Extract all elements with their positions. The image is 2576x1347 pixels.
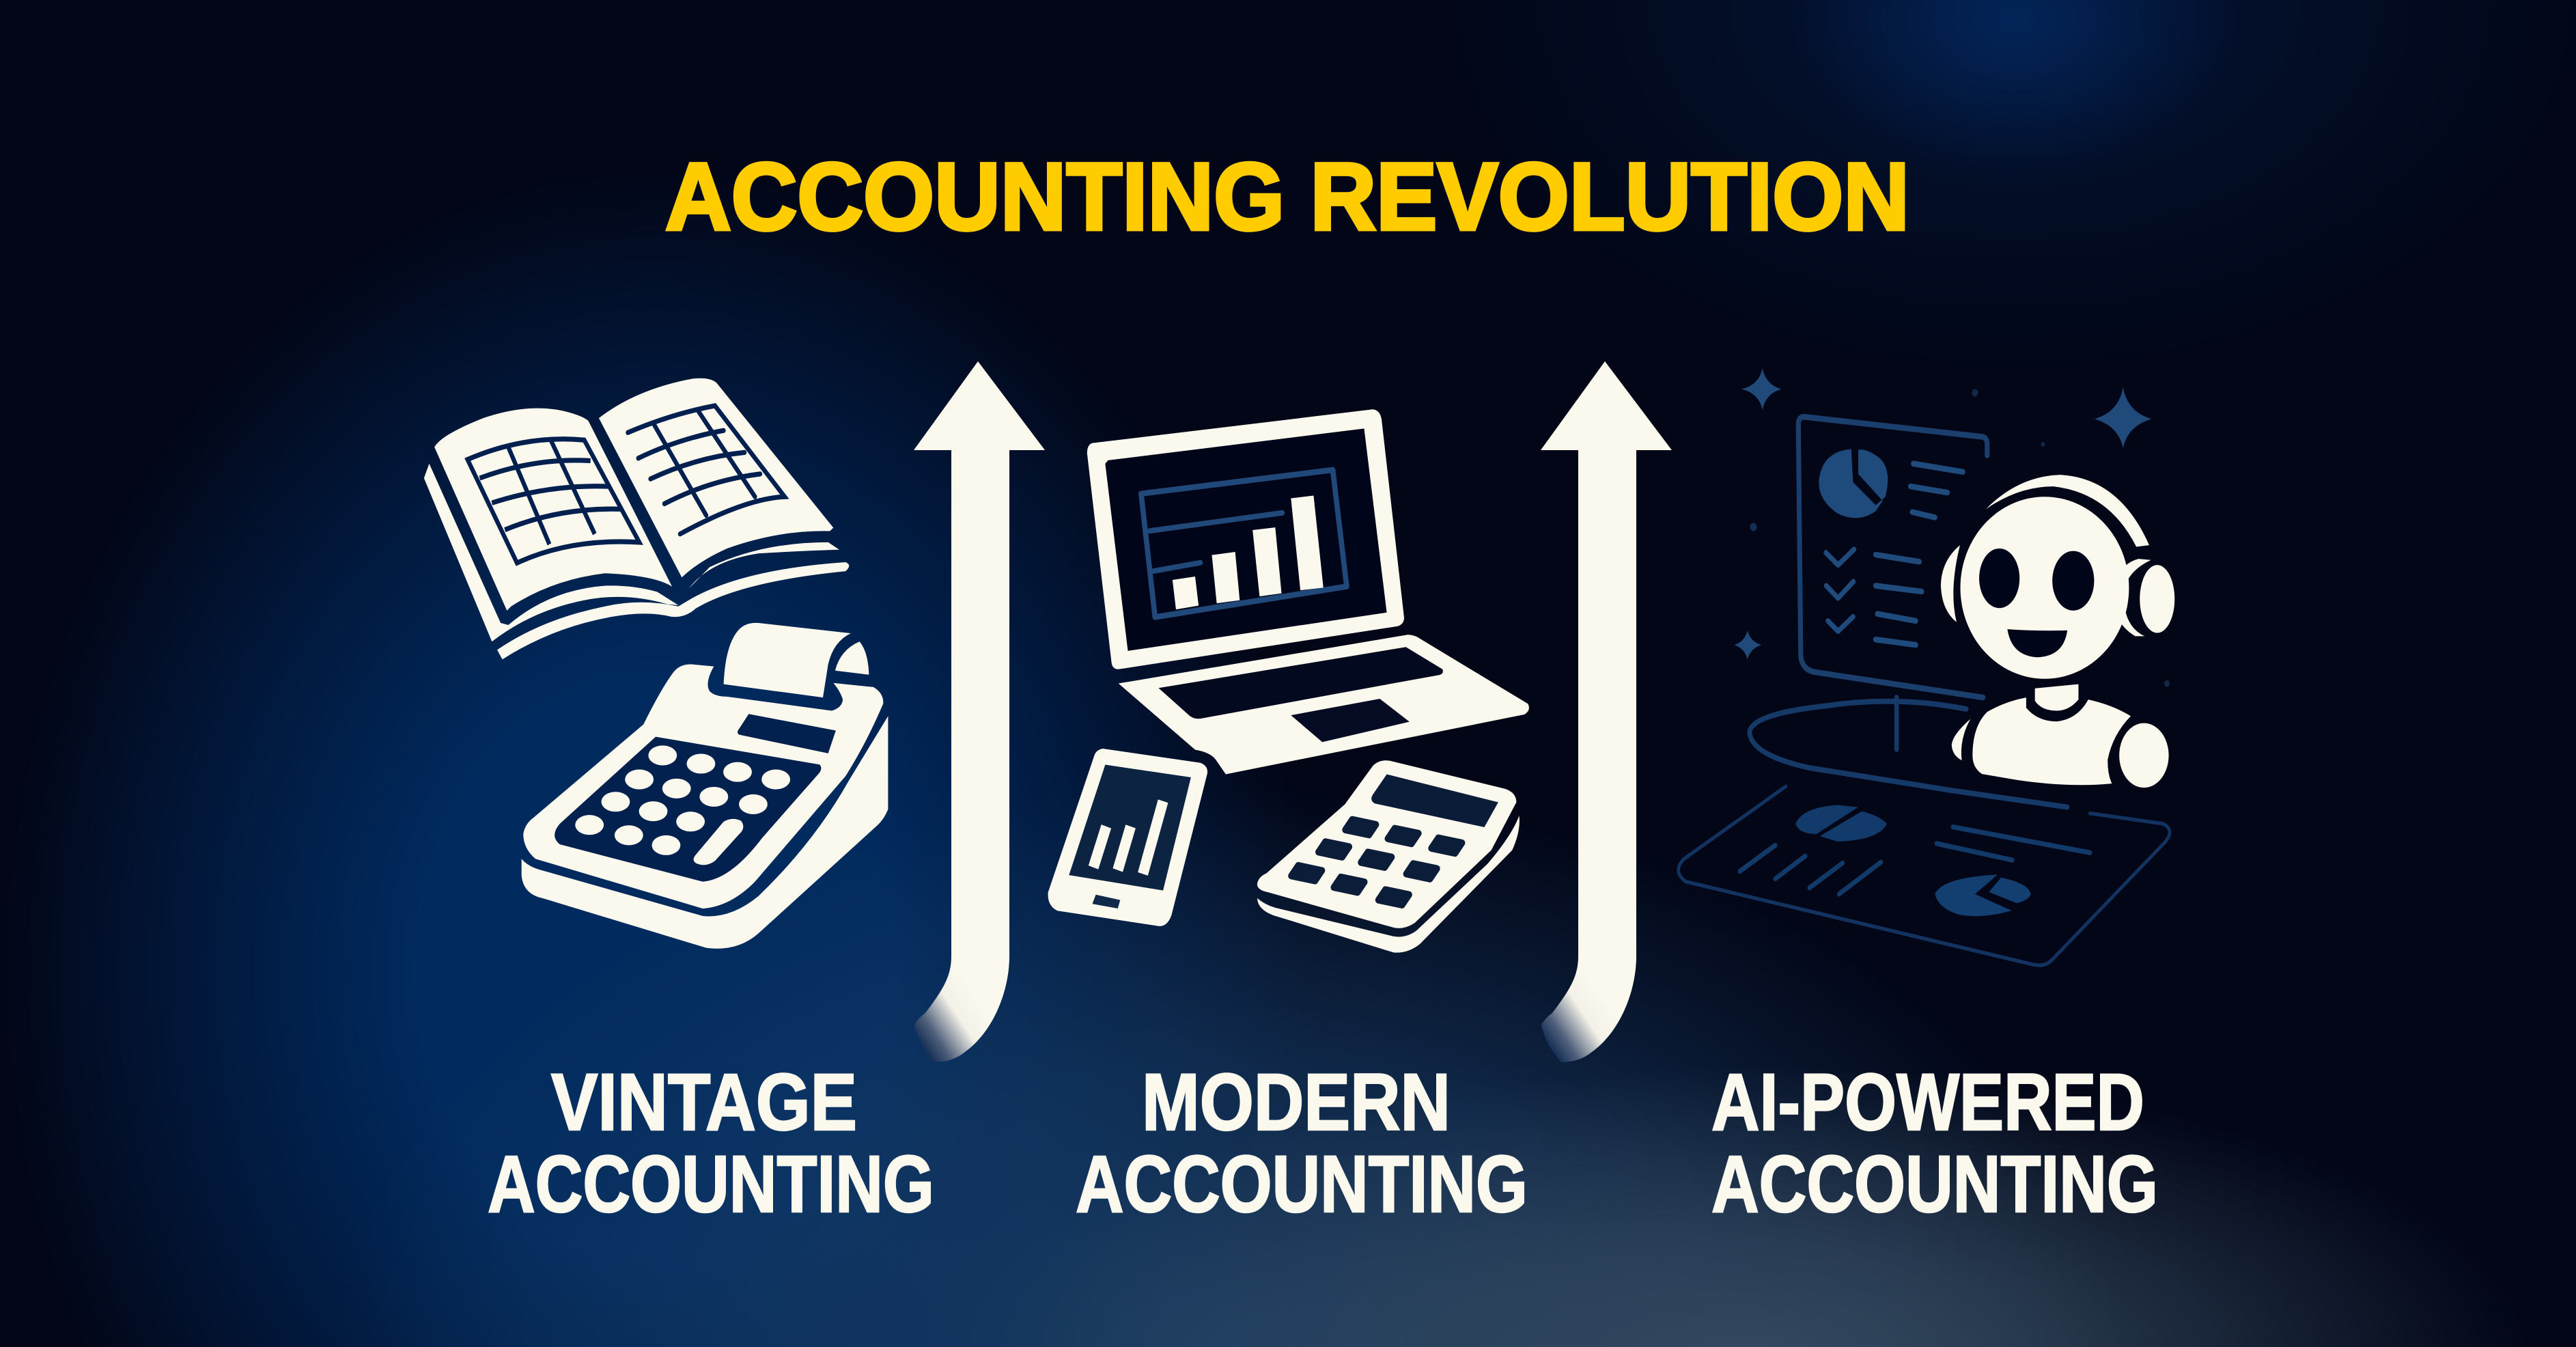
label: AI-powered accounting: ACCOUNTING — [1711, 1139, 2158, 1230]
laptop bar chart — [1141, 470, 1347, 617]
label: modern accounting — [1076, 1057, 1528, 1230]
pie chart — [1819, 449, 1888, 518]
label: modern accounting: ACCOUNTING — [1076, 1139, 1528, 1230]
arrow: modern to AI — [1541, 361, 1672, 1062]
label: vintage accounting: ACCOUNTING — [488, 1139, 934, 1230]
stand and ring — [1750, 697, 2067, 807]
icon: reflected dashboard tablet — [1679, 786, 2170, 965]
icon: phone — [1048, 749, 1207, 926]
icon: adding machine — [522, 623, 888, 949]
arrow: vintage to modern — [914, 361, 1045, 1062]
icon: ledger book — [424, 378, 849, 659]
label: vintage accounting: VINTAGE — [551, 1057, 857, 1148]
list lines — [1876, 464, 1963, 645]
icon: desk calculator — [1257, 760, 1520, 953]
right page grid — [628, 406, 785, 534]
label: AI-powered accounting — [1711, 1057, 2158, 1230]
label: AI-powered accounting: AI-POWERED — [1711, 1057, 2144, 1148]
check marks — [1826, 549, 1854, 631]
icons: sparkles — [1734, 368, 2170, 686]
icon: AI robot with headset — [1941, 475, 2174, 788]
icon: laptop — [1087, 409, 1529, 775]
left page grid — [468, 439, 639, 563]
icon: AI dashboard monitor — [1750, 417, 2067, 807]
robot neck and body — [2035, 684, 2078, 710]
label: modern accounting: MODERN — [1142, 1057, 1451, 1148]
headset band — [1986, 475, 2149, 547]
title: ACCOUNTING REVOLUTION — [665, 143, 1909, 250]
calculator keys — [575, 745, 790, 865]
label: vintage accounting — [488, 1057, 934, 1230]
headset ear right — [2114, 559, 2151, 636]
